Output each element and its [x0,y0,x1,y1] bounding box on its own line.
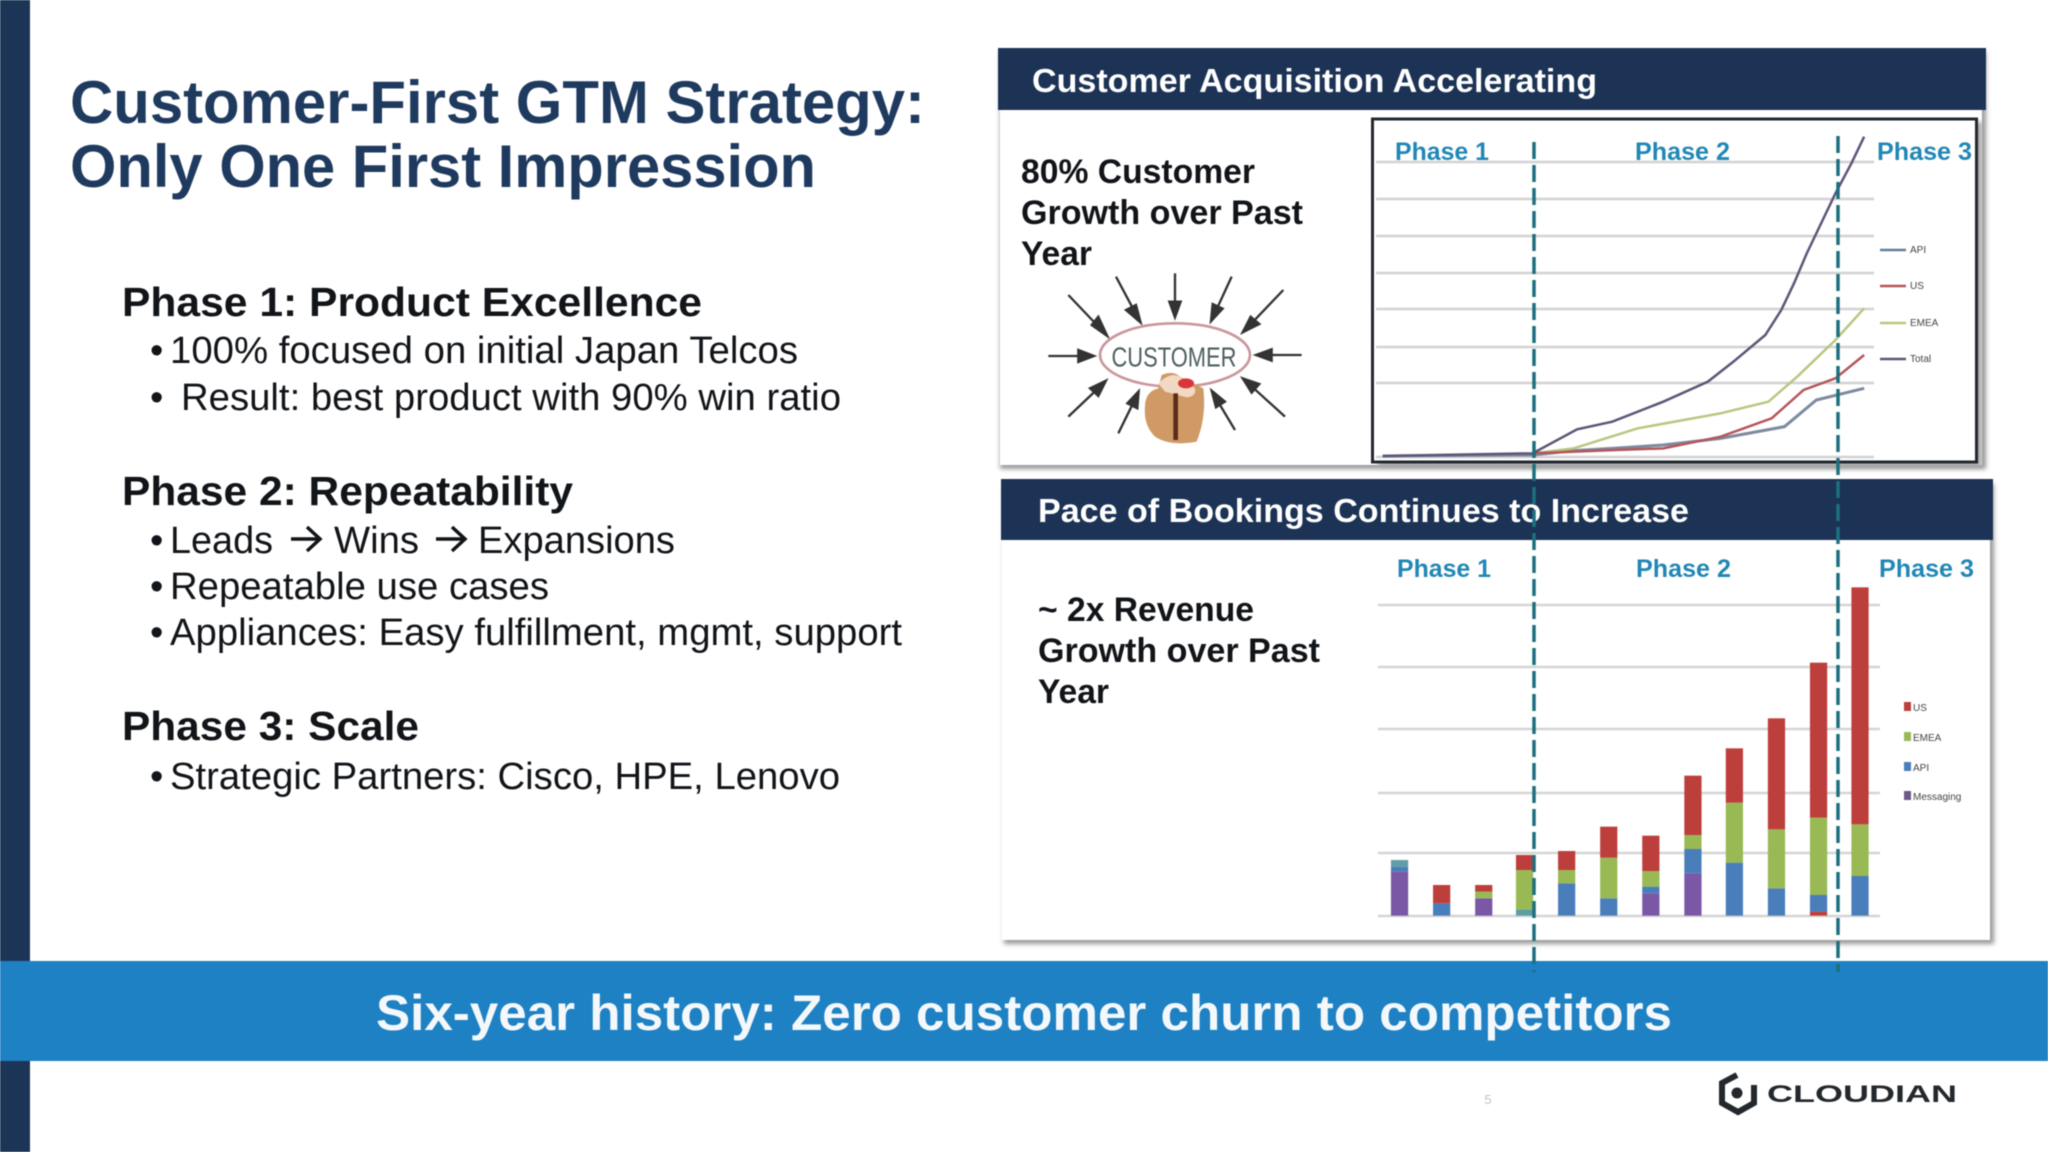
panel: bookings [1001,479,1994,944]
slide title [70,69,925,200]
chart legend: EMEA [1910,318,1939,329]
icon: customer with inward arrows and hand: CUSTOMER [1111,342,1236,373]
chart legend: US [1913,703,1927,714]
panel header: bookings: Pace of Bookings Continues to Increase [1038,492,1689,529]
chart legend: US [1910,281,1924,292]
phase divider lines [1534,136,1838,972]
chart legend [1880,245,1939,365]
chart phase labels: Phase 2 [1635,138,1730,166]
chart phase labels: Phase 3 [1877,138,1972,166]
chart phase labels: Phase 1 [1397,555,1491,583]
callout: 80% customer growth: Year [1021,235,1092,273]
banner: Six-year history: Zero customer churn to competitors [376,985,1672,1041]
chart phase labels [1397,555,1974,583]
panel header: customer acquisition: Customer Acquisition Accelerating [1032,62,1597,99]
text block: phase 3: Strategic Partners: Cisco, HPE, Lenovo [170,756,840,798]
text block: phase 1: 100% focused on initial Japan Telcos [170,330,798,372]
page number: 5 [1484,1092,1492,1107]
chart legend: Messaging [1913,792,1961,803]
text block: phase 2: • [150,566,163,608]
chart legend: API [1910,245,1926,256]
left accent strip [0,0,30,1152]
text block: phase 2: Appliances: Easy fulfillment, mgmt, support [170,612,902,654]
text block: phase 1: • [150,377,163,419]
text block: phase 2: • [150,520,163,562]
chart phase labels [1395,138,1972,166]
text block: phase 3: Phase 3: Scale [122,703,419,749]
slide title: Customer-First GTM Strategy: [70,69,925,136]
banner [0,961,2048,1061]
text block: phase 1 [122,279,841,419]
chart legend: Total [1910,354,1931,365]
text block: phase 3: • [150,756,163,798]
icon: arrow leads to wins [291,527,320,551]
chart legend: EMEA [1913,733,1942,744]
callout: 80% customer growth: 80% Customer [1021,153,1255,191]
callout: 2x revenue growth: ~ 2x Revenue [1038,591,1254,629]
panel: customer acquisition [998,48,1986,469]
logo: cloudian [1722,1075,1957,1112]
text block: phase 2: Phase 2: Repeatability [122,468,573,514]
chart phase labels: Phase 3 [1879,555,1974,583]
callout: 80% customer growth: Growth over Past [1021,194,1303,232]
text block: phase 1: Result: best product with 90% win ratio [181,377,841,419]
icon: customer with inward arrows and hand [1048,273,1302,443]
text block: phase 3 [122,703,840,798]
callout: 2x revenue growth [1038,591,1320,711]
text block: phase 2 [122,468,902,654]
panel header: bookings [1001,479,1993,540]
callout: 80% customer growth [1021,153,1303,273]
chart phase labels: Phase 2 [1636,555,1731,583]
chart legend [1904,702,1961,803]
line chart: customers by region [1372,119,1982,467]
slide title: Only One First Impression [70,133,816,200]
text block: phase 2: Expansions [478,520,675,562]
panel header: customer acquisition [998,48,1986,110]
chart phase labels: Phase 1 [1395,138,1489,166]
text block: phase 2: Repeatable use cases [170,566,549,608]
text block: phase 2: Leads [170,520,273,562]
text block: phase 2: Wins [334,520,419,562]
text block: phase 2: • [150,612,163,654]
callout: 2x revenue growth: Growth over Past [1038,632,1320,670]
stacked bar chart: bookings by region [1378,555,1974,916]
text block: phase 1: • [150,330,163,372]
chart legend: API [1913,763,1929,774]
icon: arrow wins to expansions [436,527,465,551]
logo: cloudian: CLOUDIAN [1767,1081,1957,1108]
text block: phase 1: Phase 1: Product Excellence [122,279,702,325]
callout: 2x revenue growth: Year [1038,673,1109,711]
